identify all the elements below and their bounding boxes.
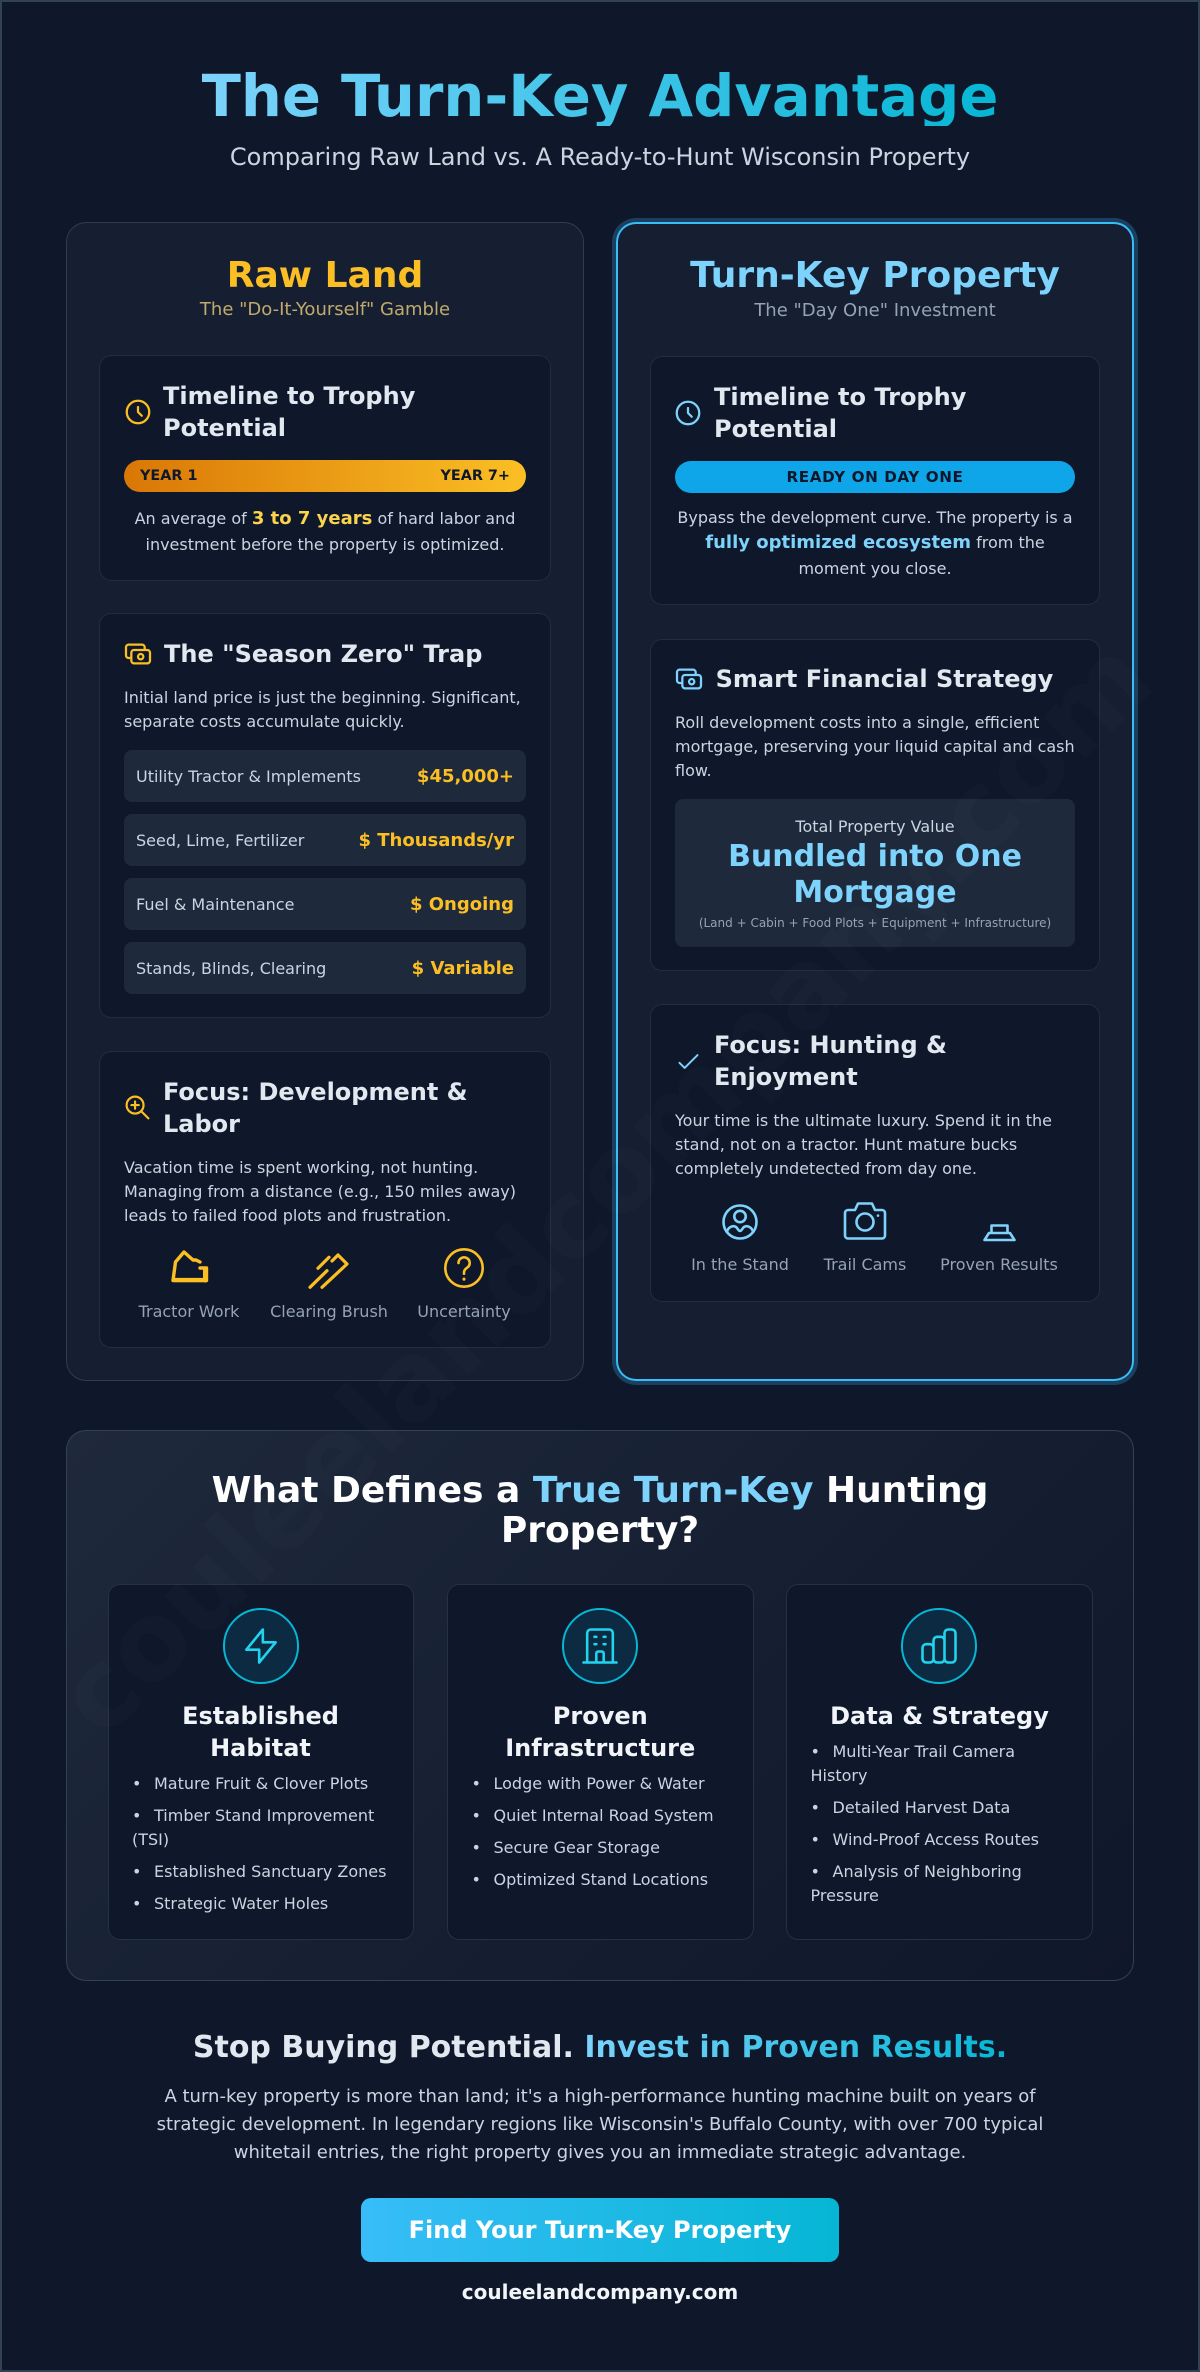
card heading: Timeline to Trophy	[714, 383, 966, 411]
cost row: tractor: $45,000+	[417, 766, 514, 786]
cost row: seed: $ Thousands/yr	[358, 830, 514, 850]
cost row: stands: Stands, Blinds, Clearing	[136, 958, 326, 978]
label: Clearing Brush	[270, 1302, 388, 1321]
panel: what defines a true turn-key property	[66, 1430, 1134, 1981]
feature list	[472, 1774, 714, 1889]
card text: Vacation time is spent working, not hunting.	[124, 1158, 478, 1177]
feature list: Optimized Stand Locations	[494, 1870, 708, 1889]
cost row: fuel	[124, 878, 526, 930]
feature list: Pressure	[810, 1886, 879, 1905]
timeline bar: year 1 to year 7+	[124, 460, 526, 492]
timeline bar: year 1 to year 7+: YEAR 7+	[440, 468, 510, 484]
timeline text: investment before the property is optimized.	[146, 535, 504, 554]
card text	[675, 1110, 1052, 1178]
card text: Managing from a distance (e.g., 150 miles away)	[124, 1182, 516, 1201]
box value: Bundled into One	[728, 838, 1022, 874]
card text	[675, 712, 1075, 780]
feature heading: Proven	[553, 1702, 648, 1730]
timeline text	[134, 508, 515, 554]
box value	[728, 838, 1022, 910]
icon: building	[562, 1608, 638, 1684]
feature list: •	[132, 1862, 141, 1881]
feature list: •	[132, 1806, 141, 1825]
feature heading	[505, 1702, 695, 1762]
ready bar	[675, 461, 1075, 493]
feature list: Timber Stand Improvement	[154, 1806, 374, 1825]
icon: bar chart	[901, 1608, 977, 1684]
feature card: proven infrastructure	[447, 1584, 754, 1940]
cost row: tractor: Utility Tractor & Implements	[136, 766, 361, 786]
card text: separate costs accumulate quickly.	[124, 712, 405, 731]
turn-key tagline: The "Day One" Investment	[754, 300, 996, 320]
feature list: •	[132, 1774, 141, 1793]
timeline text	[677, 508, 1073, 578]
website: couleelandcompany.com	[462, 2280, 738, 2304]
cost row: stands: $ Variable	[412, 958, 514, 978]
icon: tractor	[171, 1250, 208, 1282]
card text	[124, 688, 521, 731]
icon: cash	[676, 668, 702, 690]
feature list: •	[472, 1838, 481, 1857]
label: Tractor Work	[139, 1302, 239, 1321]
cost row: seed: Seed, Lime, Fertilizer	[136, 830, 304, 850]
icon: brush	[308, 1253, 349, 1289]
card heading: Potential	[163, 414, 286, 442]
icon: check	[678, 1054, 698, 1069]
card heading	[163, 382, 415, 442]
card text	[124, 1158, 516, 1225]
cost row: fuel: Fuel & Maintenance	[136, 894, 294, 914]
card: timeline turn-key	[650, 356, 1100, 605]
card heading: Potential	[714, 415, 837, 443]
feature list: •	[810, 1742, 820, 1761]
closing heading: Stop Buying Potential. Invest in Proven Results.	[193, 2030, 1007, 2065]
item: uncertainty	[417, 1248, 511, 1321]
item: proven results	[940, 1224, 1058, 1274]
raw land heading: Raw Land	[227, 255, 423, 296]
icon: clock	[126, 400, 150, 424]
card heading	[163, 1078, 468, 1138]
feature list: •	[132, 1894, 141, 1913]
feature list: Mature Fruit & Clover Plots	[154, 1774, 368, 1793]
card heading: Focus: Hunting &	[714, 1031, 947, 1059]
feature list: •	[472, 1774, 481, 1793]
card heading: Labor	[163, 1110, 240, 1138]
icon: person	[722, 1204, 758, 1240]
feature heading: Established	[182, 1702, 339, 1730]
card heading: The "Season Zero" Trap	[164, 640, 482, 668]
closing text: strategic development. In legendary regions like Wisconsin's Buffalo County, with over 700 typical	[157, 2114, 1043, 2135]
item: tractor work	[138, 1250, 240, 1321]
card heading: Focus: Development &	[163, 1078, 468, 1106]
feature list: Strategic Water Holes	[154, 1894, 328, 1913]
subtitle: Comparing Raw Land vs. A Ready-to-Hunt Wisconsin Property	[230, 143, 970, 171]
timeline text: moment you close.	[798, 559, 952, 578]
cost row: stands	[124, 942, 526, 994]
feature list: Lodge with Power & Water	[494, 1774, 705, 1793]
section heading: What Defines a True Turn-Key Hunting	[212, 1470, 988, 1511]
feature list: Analysis of Neighboring	[832, 1862, 1022, 1881]
closing text: A turn-key property is more than land; it's a high-performance hunting machine built on years of	[164, 2086, 1036, 2107]
feature list: •	[810, 1862, 820, 1881]
closing text: whitetail entries, the right property gives you an immediate strategic advantage.	[234, 2142, 966, 2163]
feature heading: Data & Strategy	[830, 1702, 1049, 1730]
icon: stand	[983, 1224, 1016, 1242]
card: focus development and labor	[99, 1051, 551, 1348]
feature list: Quiet Internal Road System	[494, 1806, 714, 1825]
timeline bar: year 1 to year 7+: YEAR 1	[140, 468, 198, 484]
call-to-action button	[361, 2198, 839, 2262]
cost row: fuel: $ Ongoing	[410, 894, 514, 914]
closing text	[157, 2086, 1043, 2163]
feature list: (TSI)	[132, 1830, 169, 1849]
feature list: •	[810, 1798, 820, 1817]
title: The Turn-Key Advantage	[202, 63, 998, 130]
call-to-action button: Find Your Turn-Key Property	[409, 2216, 791, 2244]
feature list: Secure Gear Storage	[494, 1838, 660, 1857]
card text: mortgage, preserving your liquid capital and cash	[675, 736, 1075, 756]
icon: cash	[124, 644, 152, 664]
icon: lightning bolt	[222, 1608, 298, 1684]
icon: camera	[844, 1202, 886, 1240]
feature card: data and strategy	[786, 1584, 1093, 1940]
card text: leads to failed food plots and frustration.	[124, 1206, 451, 1225]
item: clearing brush	[270, 1253, 388, 1321]
feature list: Multi-Year Trail Camera	[832, 1742, 1015, 1761]
label: Trail Cams	[824, 1255, 906, 1274]
card text: stand, not on a tractor. Hunt mature bucks	[675, 1134, 1017, 1154]
section heading: Property?	[501, 1510, 699, 1551]
feature card: established habitat	[108, 1584, 414, 1940]
icon: zoom in	[126, 1096, 150, 1120]
cost row: seed	[124, 814, 526, 866]
card text: completely undetected from day one.	[675, 1158, 977, 1178]
cost row: tractor	[124, 750, 526, 802]
card text: Initial land price is just the beginning. Significant,	[124, 688, 521, 707]
card heading: Timeline to Trophy	[163, 382, 415, 410]
card heading: Enjoyment	[714, 1063, 858, 1091]
card: timeline raw land	[99, 355, 551, 581]
feature list: •	[472, 1806, 481, 1825]
feature list: Established Sanctuary Zones	[154, 1862, 386, 1881]
feature list: History	[810, 1766, 867, 1785]
item: trail cams	[824, 1202, 906, 1274]
box label: Total Property Value	[795, 816, 955, 836]
raw land tagline: The "Do-It-Yourself" Gamble	[200, 299, 450, 320]
feature list: Detailed Harvest Data	[832, 1798, 1010, 1817]
box value: Mortgage	[793, 874, 957, 910]
timeline text: Bypass the development curve. The property is a	[677, 508, 1073, 526]
turn-key heading: Turn-Key Property	[690, 255, 1060, 296]
card heading: Smart Financial Strategy	[716, 665, 1053, 693]
card heading	[714, 1031, 947, 1091]
panel: turn-key property	[616, 222, 1134, 1381]
label: Proven Results	[940, 1255, 1058, 1274]
feature list: •	[472, 1870, 481, 1889]
card text: flow.	[675, 760, 712, 780]
bundled value box	[675, 799, 1075, 947]
feature heading: Infrastructure	[505, 1734, 695, 1762]
timeline text: fully optimized ecosystem from the	[705, 532, 1045, 553]
panel: raw land	[66, 222, 584, 1381]
timeline text: An average of 3 to 7 years of hard labor and	[135, 508, 515, 529]
card text: Roll development costs into a single, efficient	[675, 712, 1039, 732]
card: season zero trap	[99, 613, 551, 1018]
card heading	[714, 383, 966, 443]
icon: question mark	[444, 1248, 484, 1288]
feature list: •	[810, 1830, 820, 1849]
section heading	[212, 1470, 988, 1551]
feature heading	[182, 1702, 339, 1762]
label: Uncertainty	[417, 1302, 511, 1321]
card: smart financial strategy	[650, 639, 1100, 971]
feature list	[132, 1774, 386, 1913]
card: focus hunting and enjoyment	[650, 1004, 1100, 1302]
label: In the Stand	[691, 1255, 789, 1274]
box note: (Land + Cabin + Food Plots + Equipment + Infrastructure)	[699, 916, 1051, 930]
ready bar: READY ON DAY ONE	[786, 468, 964, 486]
item: in the stand	[691, 1204, 789, 1274]
feature list	[810, 1742, 1039, 1905]
feature heading: Habitat	[210, 1734, 311, 1762]
icon: clock	[676, 400, 700, 426]
card text: Your time is the ultimate luxury. Spend it in the	[675, 1110, 1052, 1130]
feature list: Wind-Proof Access Routes	[832, 1830, 1039, 1849]
